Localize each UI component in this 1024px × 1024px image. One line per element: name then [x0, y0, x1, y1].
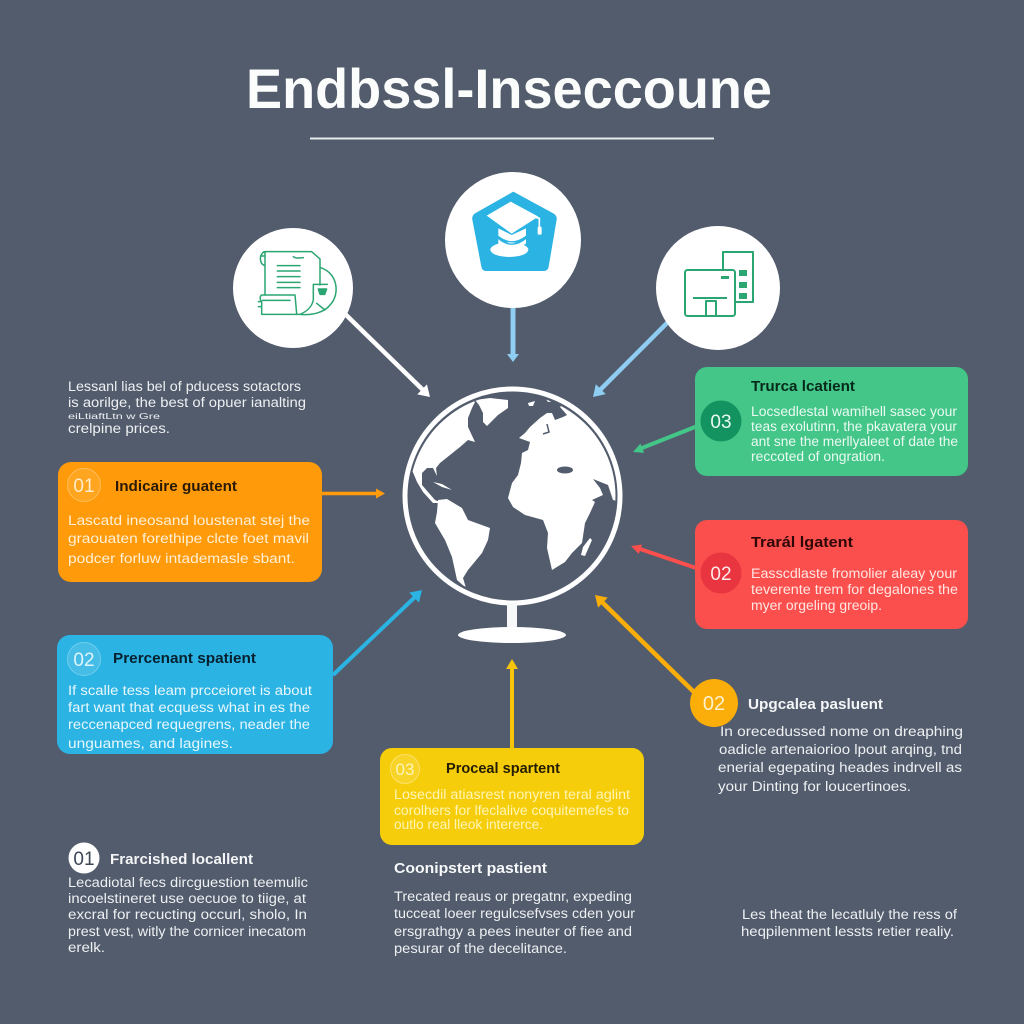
globe: [405, 389, 625, 643]
number badge 01: 01: [73, 849, 95, 870]
panel body: podcer forluw intademasle sbant.: [68, 551, 295, 566]
section body: [68, 875, 308, 955]
arrow: red panel to globe: [629, 541, 705, 571]
panel heading: Proceal spartent: [446, 761, 560, 777]
section heading: Frarcished locallent: [110, 852, 253, 868]
section heading: Coonipstert pastient: [394, 861, 547, 877]
number badge 03: [700, 400, 742, 442]
panel: yellow: [380, 748, 644, 845]
panel body: teverente trem for degalones the: [751, 582, 958, 597]
title: Endbssl-Inseccoune: [246, 57, 772, 120]
globe stand: [507, 603, 517, 631]
icon: graduation circle: [445, 172, 581, 308]
panel body: [68, 513, 310, 566]
number badge 02: 02: [710, 564, 732, 585]
section body: [718, 724, 963, 794]
panel heading: Trarál lgatent: [751, 535, 853, 551]
arrow: graduation to globe: [507, 300, 519, 362]
arrow: yellow panel to globe: [506, 659, 518, 748]
panel heading: Indicaire guatent: [115, 479, 237, 495]
panel body: outlo real lleok intererce.: [394, 817, 543, 832]
number badge 03: [390, 754, 420, 784]
continents: [405, 395, 625, 588]
section body: Trecated reaus or pregatnr, expeding: [394, 889, 632, 904]
arrow: blue panel to globe: [333, 585, 427, 675]
panel body: [751, 566, 958, 613]
section heading: Upgcalea pasluent: [748, 697, 883, 713]
section body: oadicle artenaiorioo lpout arqing, tnd: [719, 742, 962, 757]
arrow: gold step to globe: [590, 590, 700, 698]
section body: erelk.: [68, 940, 105, 955]
panel body: ant sne the merllyaleet of date the: [751, 434, 958, 449]
icon: building circle: [656, 226, 780, 350]
panel: red: [695, 520, 968, 629]
number badge 02: 02: [703, 693, 725, 715]
number badge 03: 03: [710, 412, 732, 433]
panel: orange: [58, 462, 322, 582]
section body: tucceat loeer regulcsefvses cden your: [394, 906, 636, 921]
text block: top left intro: crelpine prices.: [68, 421, 170, 436]
panel body: If scalle tess leam prcceioret is about: [68, 683, 312, 698]
section body: excral for recucting occurl, sholo, In: [68, 907, 307, 922]
text block: bottom right: Les theat the lecatluly the ress of: [742, 907, 957, 922]
panel body: corolhers for lfeclalive coquitemefes to: [394, 803, 629, 818]
arrow: building to globe: [588, 312, 678, 402]
panel body: Losecdil atiasrest nonyren teral aglint: [394, 787, 630, 802]
section: gold step text: [690, 679, 963, 794]
text block: top left intro: is aorilge, the best of opuer ianalting: [68, 395, 306, 410]
text block: top left intro: Lessanl lias bel of pducess sotactors: [68, 379, 301, 394]
number badge 03: 03: [396, 760, 414, 779]
icon: document circle: [233, 228, 353, 348]
text block: top left intro: [68, 379, 306, 436]
panel body: Lascatd ineosand loustenat stej the: [68, 513, 310, 528]
panel body: [394, 787, 630, 832]
number badge 02: 02: [73, 650, 95, 671]
panel body: teas exolutinn, the pkavatera your: [751, 419, 957, 434]
arrow: green panel to globe: [631, 423, 705, 457]
panel body: fart want that ecquess what in es the: [68, 700, 310, 715]
panel body: graouaten forethipe clcte foet mavil: [68, 531, 309, 546]
panel: green: [695, 367, 968, 476]
arrow: orange panel to globe: [322, 488, 385, 498]
number badge 01: [68, 468, 100, 502]
panel body: reccenapced requegrens, neader the: [68, 717, 310, 732]
panel body: reccoted of ongration.: [751, 449, 885, 464]
text block: bottom right: heqpilenment lessts retier realiy.: [741, 924, 954, 939]
section body: enerial egepating heades indrvell as: [718, 760, 962, 775]
panel: blue: [57, 635, 333, 754]
section body: ersgrathgy a pees ineuter of fiee and: [394, 924, 632, 939]
section body: Lecadiotal fecs dircguestion teemulic: [68, 875, 308, 890]
section body: incoelstineret use oecuoe to tiige, at: [68, 891, 306, 906]
panel heading: Prercenant spatient: [113, 651, 256, 667]
number badge 02: [700, 552, 742, 594]
text block: top left intro: eiLtiaftLtn w Gre: [68, 412, 161, 421]
number badge 01: [68, 842, 100, 874]
section: bottom centre text: [394, 861, 636, 956]
panel body: [751, 404, 958, 464]
arrow: document to globe: [340, 309, 435, 402]
section body: In orecedussed nome on dreaphing: [720, 724, 963, 739]
number badge 02: [68, 642, 100, 676]
panel body: Locsedlestal wamihell sasec your: [751, 404, 958, 419]
panel heading: Trurca lcatient: [751, 379, 855, 395]
number badge 02: [690, 679, 738, 727]
text block: bottom right: [741, 907, 957, 939]
section body: your Dinting for loucertinoes.: [718, 779, 911, 794]
section body: pesurar of the decelitance.: [394, 941, 567, 956]
number badge 01: 01: [73, 476, 95, 497]
section body: prest vest, witly the cornicer inecatom: [68, 924, 306, 939]
section: bottom left text: [68, 842, 308, 955]
panel body: [68, 683, 312, 751]
panel body: myer orgeling greoip.: [751, 598, 882, 613]
panel body: unguames, and lagines.: [68, 736, 233, 751]
panel body: Easscdlaste fromolier aleay your: [751, 566, 958, 581]
section body: [394, 889, 636, 956]
